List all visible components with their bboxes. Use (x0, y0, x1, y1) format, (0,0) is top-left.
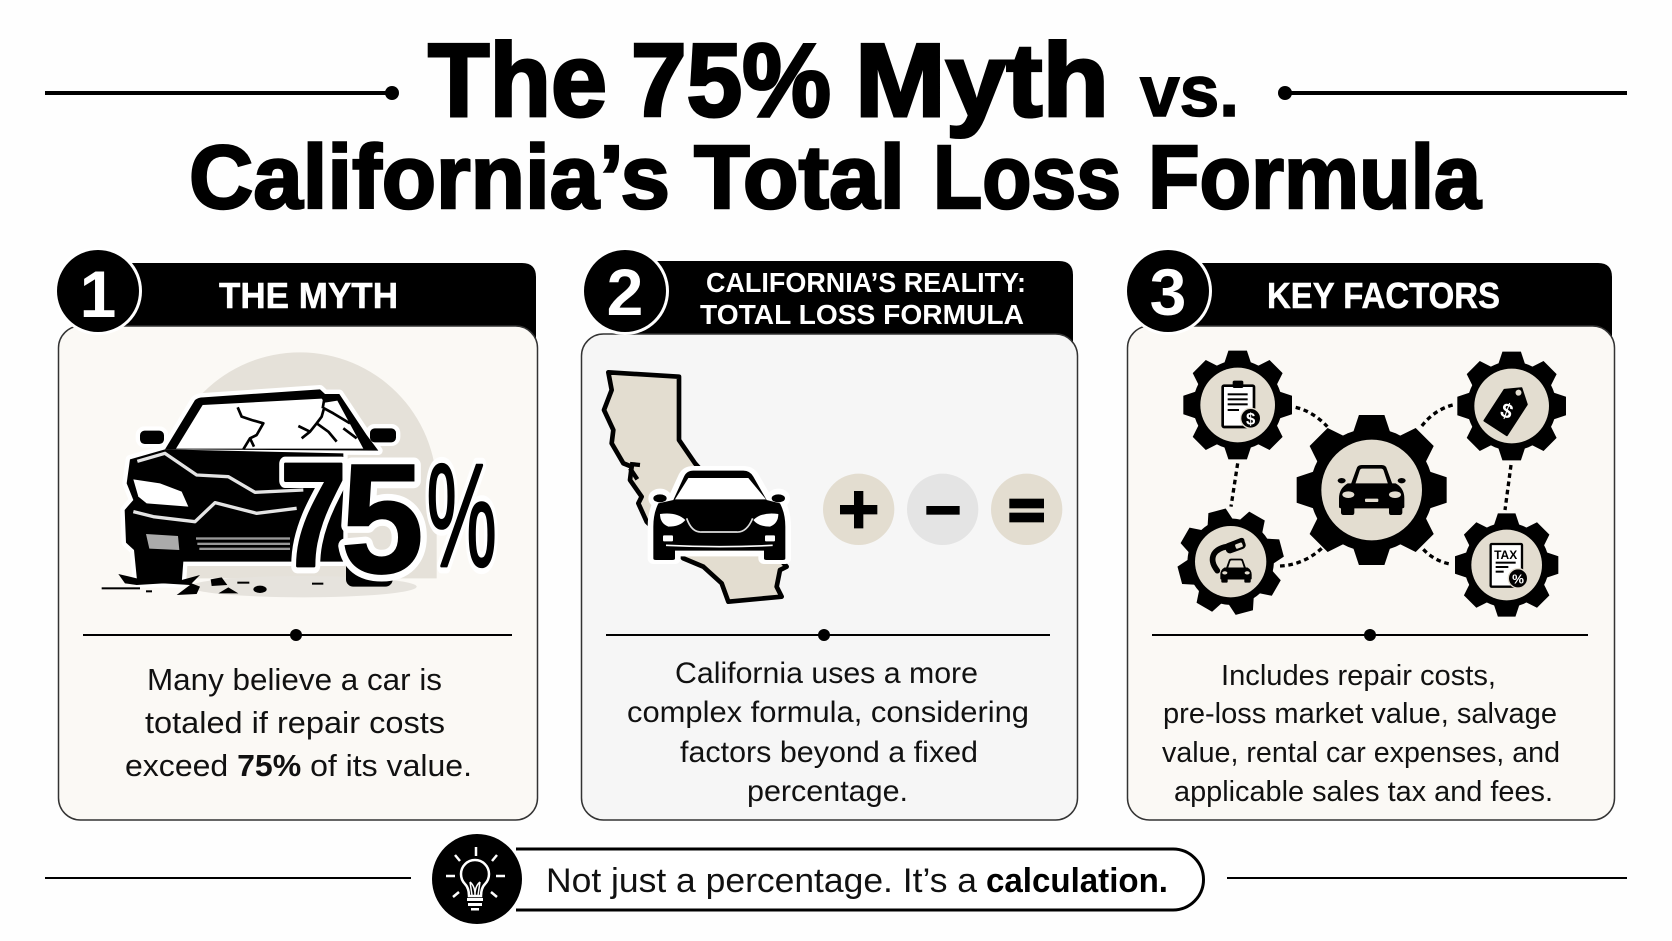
panel 1 text (125, 662, 472, 783)
gear: tax and fees: TAX (1494, 548, 1517, 562)
title: Myth (855, 23, 1109, 139)
panel 3 text: value, rental car expenses, and (1162, 737, 1560, 769)
header text 3: KEY FACTORS (1267, 275, 1500, 316)
header badge 1 (54, 247, 142, 335)
panel 3 text (1162, 660, 1560, 808)
wrecked car with 75%: 7 (280, 433, 347, 598)
panel 3 card (1128, 326, 1614, 820)
gear: tax and fees (1455, 513, 1558, 617)
gear: rental car (1166, 497, 1295, 626)
callout pill: calculation. (986, 862, 1168, 900)
panel 2 divider (606, 629, 1050, 641)
wrecked car with 75%: 5 (341, 432, 424, 607)
panel: key factors (1124, 247, 1614, 820)
title: Total (694, 128, 905, 228)
wrecked car with 75%: 5 (341, 432, 424, 607)
header badge 3: 3 (1150, 255, 1186, 329)
panel 2 text: complex formula, considering (627, 696, 1029, 729)
callout pill (516, 849, 1204, 910)
panel 3 text: applicable sales tax and fees. (1174, 776, 1553, 808)
panel 1 divider (83, 629, 512, 641)
header text 2: CALIFORNIA’S REALITY: (706, 267, 1026, 298)
gear: tax and fees: % (1512, 571, 1524, 586)
panel 1 text: Many believe a car is (147, 662, 442, 697)
connectors (1231, 405, 1511, 566)
wrecked car with 75%: % (427, 434, 497, 598)
panel 3 text: Includes repair costs, (1221, 660, 1496, 692)
gear: vehicle center (1297, 415, 1447, 565)
wrecked car with 75% (102, 352, 497, 607)
panel: the myth (54, 247, 538, 820)
header badge 2 (581, 247, 669, 335)
gear: market value tag: $ (1497, 399, 1516, 424)
header text 1: THE MYTH (219, 275, 398, 316)
title (189, 23, 1482, 228)
panel 2 text: factors beyond a fixed (680, 736, 978, 769)
panel 1 text: totaled if repair costs (145, 705, 445, 740)
panel 2 card (582, 334, 1078, 820)
title: Formula (1148, 128, 1482, 228)
header badge 2: 2 (607, 255, 643, 329)
callout pill: Not just a percentage. It’s a (546, 862, 977, 900)
footer rule right (1227, 877, 1627, 879)
wrecked car with 75%: 7 (280, 433, 347, 598)
header text 2: TOTAL LOSS FORMULA (700, 299, 1024, 330)
title: California’s (189, 128, 670, 228)
header badge 3 (1124, 247, 1212, 335)
wrecked car with 75%: % (427, 434, 497, 598)
header bar 3 (1190, 263, 1612, 340)
gear: repair costs (1183, 351, 1292, 459)
icon: light bulb (432, 834, 522, 924)
header badge 1: 1 (80, 257, 116, 331)
title: vs. (1140, 52, 1239, 132)
panel 1 text: exceed 75% of its value. (125, 748, 472, 783)
title: 75% (631, 23, 831, 139)
gear diagram (1166, 351, 1566, 626)
header bar 2 (620, 261, 1073, 345)
panel 3 text: pre-loss market value, salvage (1163, 698, 1557, 730)
panel: california's reality (581, 247, 1078, 820)
gear: repair costs: $ (1246, 409, 1256, 428)
gear: market value tag (1457, 352, 1566, 460)
panel 2 text: California uses a more (675, 657, 978, 690)
panel 1 card (58, 326, 538, 820)
title rule right (1278, 86, 1627, 100)
title rule left (45, 86, 399, 100)
footer rule left (45, 877, 411, 879)
title: The (428, 23, 607, 139)
panel 3 divider (1152, 629, 1588, 641)
title: Loss (933, 128, 1121, 228)
header bar 1 (120, 263, 536, 340)
header text 2 (700, 267, 1026, 330)
panel 2 text (627, 657, 1029, 808)
panel 2 text: percentage. (747, 775, 908, 808)
california map and car (604, 372, 1062, 602)
